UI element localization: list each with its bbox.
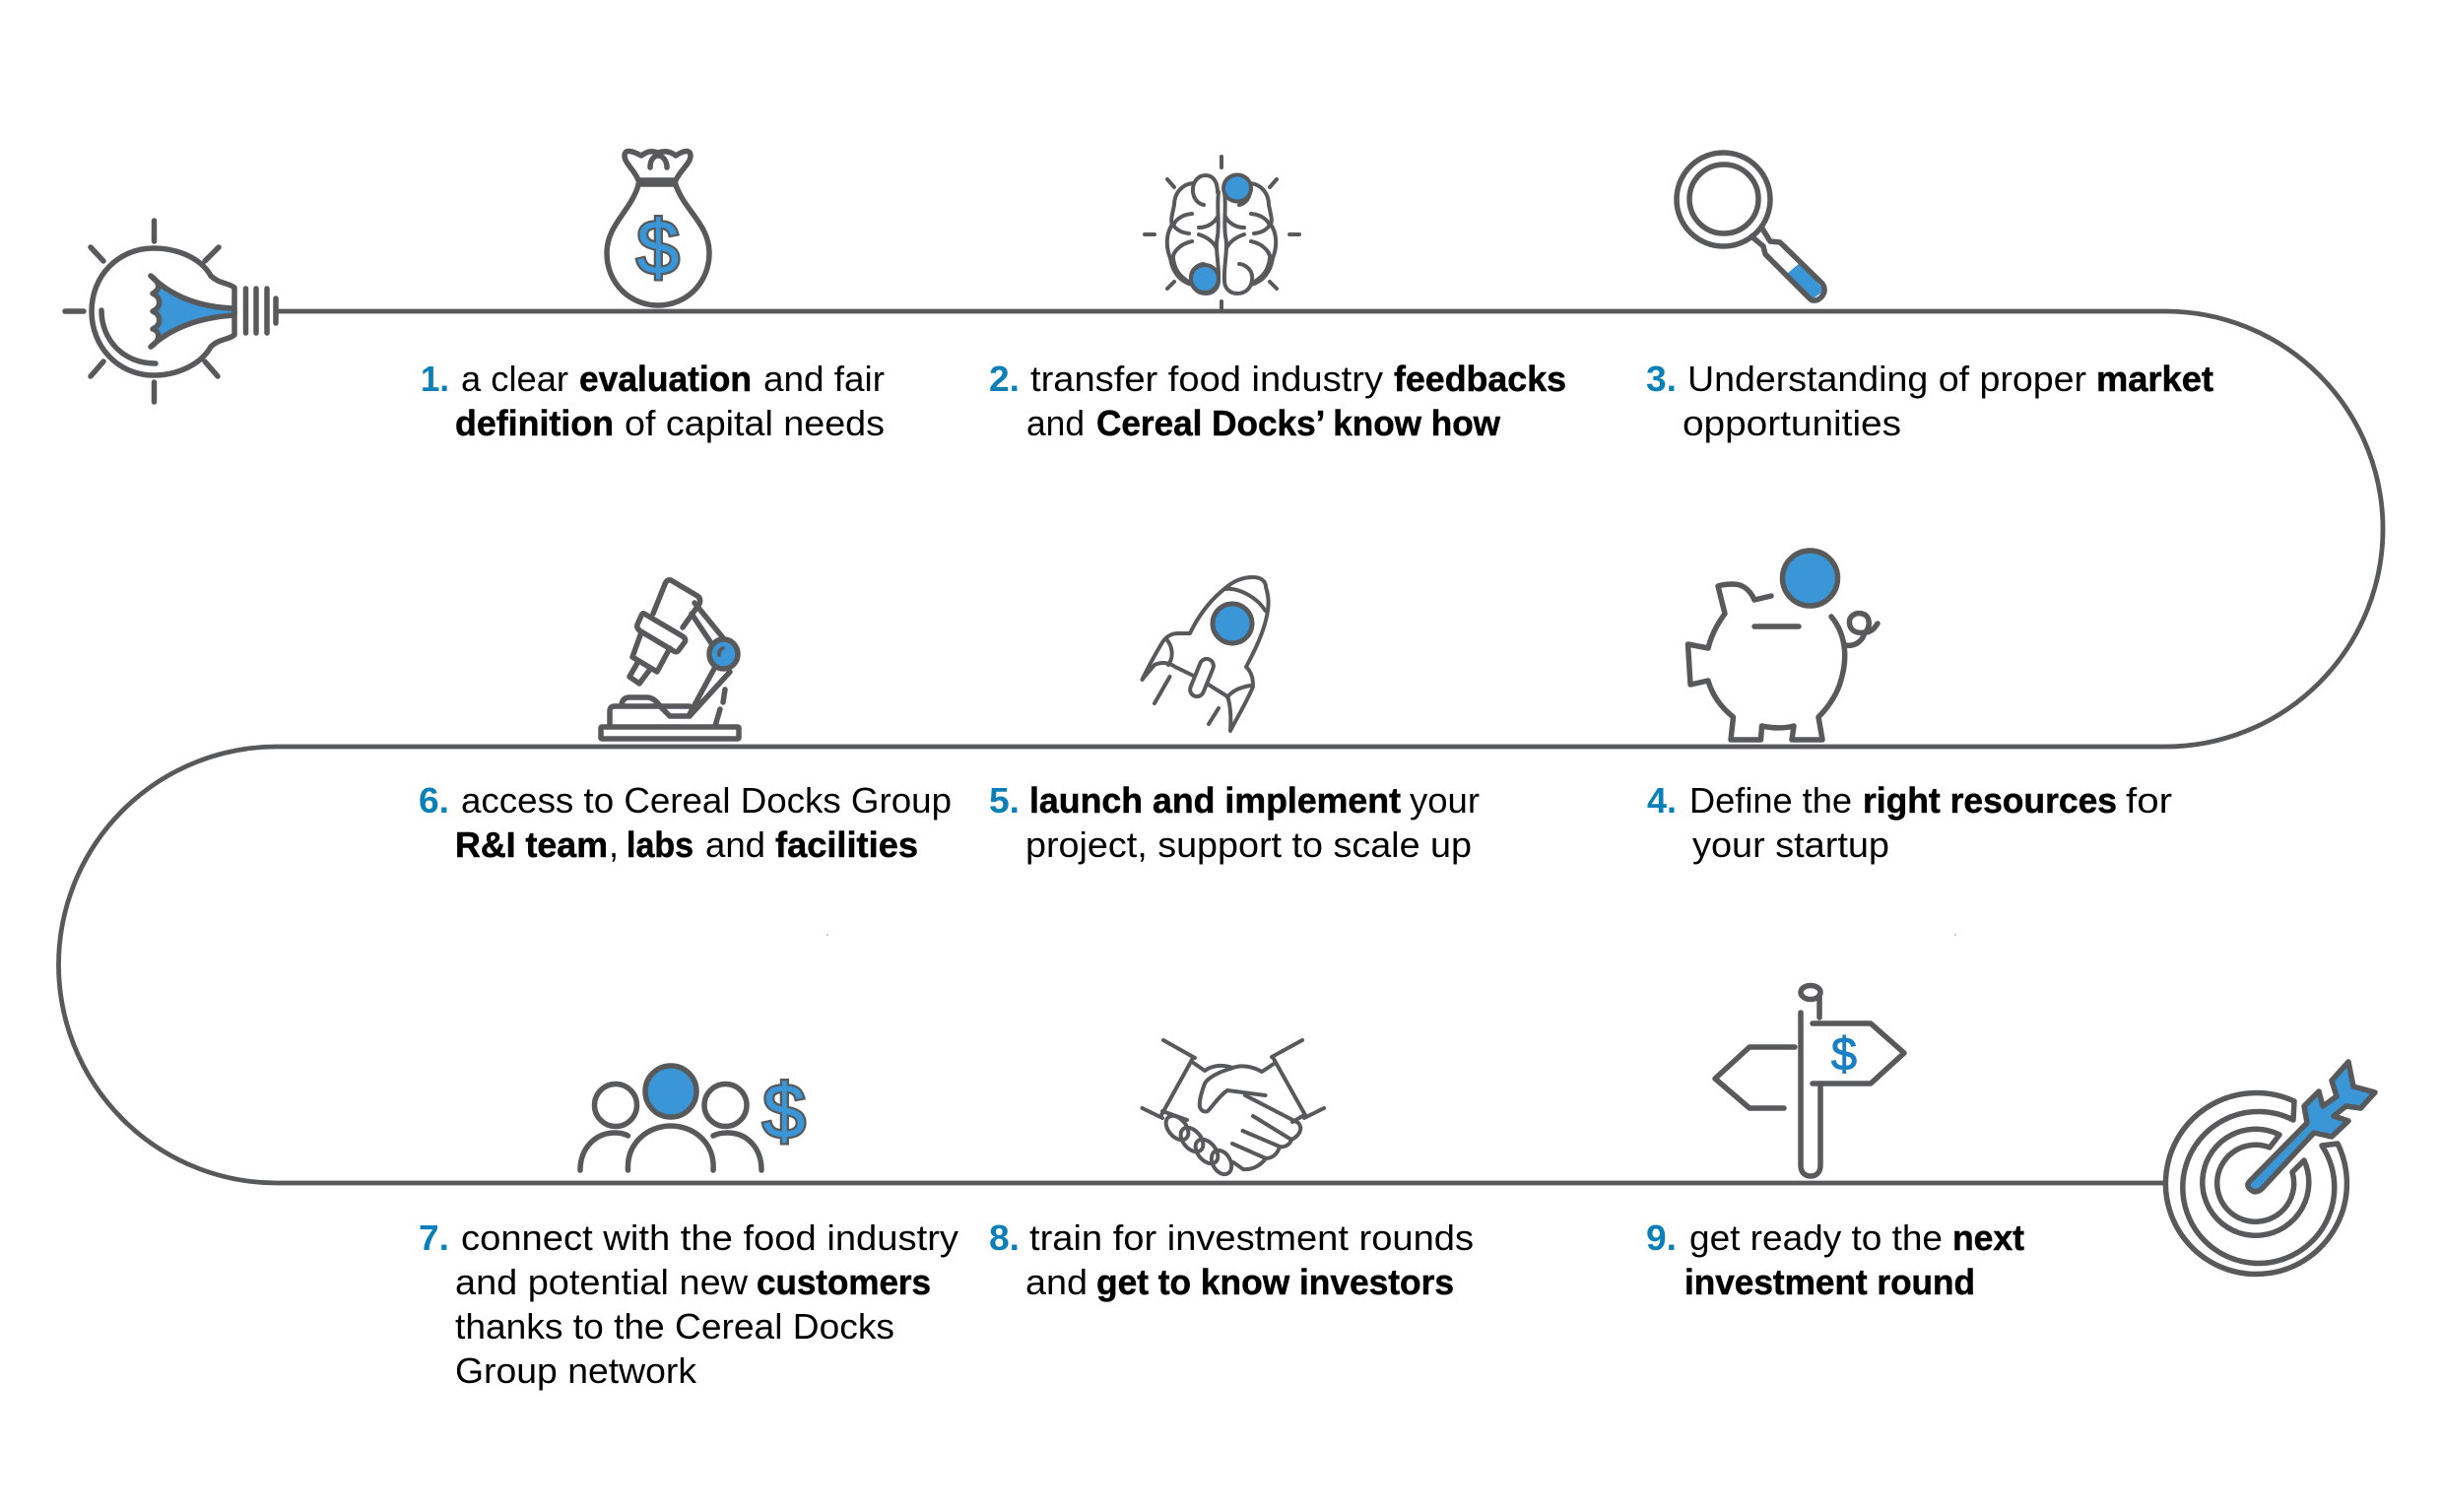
icon: microscope	[601, 580, 739, 739]
step 3 text: Understanding of proper	[1687, 359, 2086, 399]
icon: brain	[1145, 157, 1299, 309]
step 6 text: R&I team	[455, 824, 608, 865]
step 6 text	[419, 780, 952, 865]
step 6 text: access to Cereal Docks Group	[461, 780, 952, 821]
winding path line	[59, 311, 2383, 1183]
step 9 text: 9.	[1646, 1217, 1677, 1258]
icon: signpost: $	[1831, 1027, 1857, 1080]
step 7 text: 7.	[419, 1217, 449, 1258]
icon: rocket	[1143, 577, 1269, 731]
icon: money bag	[607, 152, 709, 305]
step 3 text: opportunities	[1683, 403, 1901, 443]
step 7 text: connect with the food industry	[461, 1217, 958, 1258]
step 8 text: get to know investors	[1096, 1262, 1454, 1302]
icon: target with arrow	[2165, 1062, 2375, 1275]
step 4 text: your startup	[1692, 824, 1889, 865]
step 7 text: Group network	[455, 1350, 697, 1391]
step 5 text: your	[1410, 780, 1480, 821]
step 1 text	[421, 359, 885, 443]
step 5 text: project, support to scale up	[1025, 824, 1472, 865]
step 4 text: 4.	[1647, 780, 1677, 821]
step 1 text: definition	[455, 403, 614, 443]
step 7 text	[419, 1217, 958, 1391]
step 1 text: and fair	[763, 359, 885, 399]
step 2 text: transfer food industry	[1030, 359, 1383, 399]
step 2 text: and	[1026, 403, 1085, 443]
step 5 text	[989, 780, 1480, 865]
step 1 text: of capital needs	[625, 403, 885, 443]
step 1 text: 1.	[421, 359, 449, 399]
icon: piggy bank	[1688, 551, 1878, 740]
step 6 text: and	[705, 824, 765, 865]
step 8 text: and	[1025, 1262, 1088, 1302]
icon: team and dollar	[580, 1066, 806, 1170]
step 4 text: for	[2126, 780, 2172, 821]
step 9 text: investment round	[1684, 1262, 1975, 1302]
step 2 text: Cereal Docks’ know how	[1096, 403, 1501, 443]
step 2 text	[989, 359, 1566, 443]
icon: signpost	[1715, 985, 1904, 1176]
step 6 text: 6.	[419, 780, 449, 821]
step 6 text: ,	[609, 824, 619, 865]
step 3 text	[1646, 359, 2213, 443]
specks	[826, 934, 1956, 936]
step 1 text: evaluation	[579, 359, 752, 399]
step 5 text: launch and implement	[1029, 780, 1401, 821]
icon: light bulb	[65, 221, 276, 402]
step 1 text: a clear	[461, 359, 568, 399]
step 4 text: right resources	[1863, 780, 2117, 821]
icon: handshake	[1143, 1040, 1324, 1178]
step 3 text: market	[2096, 359, 2213, 399]
icon: magnifying glass	[1677, 153, 1824, 300]
step 3 text: 3.	[1646, 359, 1677, 399]
step 8 text: train for investment rounds	[1029, 1217, 1474, 1258]
step 4 text	[1647, 780, 2172, 865]
step 5 text: 5.	[989, 780, 1020, 821]
icon: money bag: $	[636, 204, 680, 291]
step 9 text: next	[1952, 1217, 2024, 1258]
step 6 text: facilities	[775, 824, 918, 865]
step 2 text: 2.	[989, 359, 1020, 399]
step 4 text: Define the	[1689, 780, 1852, 821]
step 7 text: and potential new	[455, 1262, 749, 1302]
step 7 text: customers	[757, 1262, 931, 1302]
step 9 text: get ready to the	[1689, 1217, 1943, 1258]
step 8 text	[989, 1217, 1474, 1302]
step 2 text: feedbacks	[1394, 359, 1566, 399]
step 8 text: 8.	[989, 1217, 1020, 1258]
step 6 text: labs	[627, 824, 693, 865]
icon: team and dollar: $	[762, 1068, 806, 1154]
step 7 text: thanks to the Cereal Docks	[455, 1306, 894, 1347]
step 9 text	[1646, 1217, 2024, 1302]
